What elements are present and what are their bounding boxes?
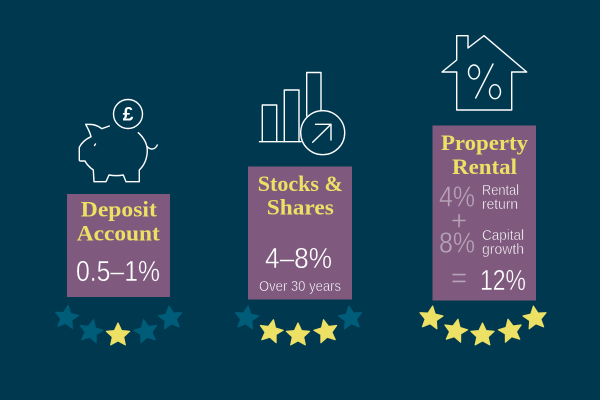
value: 0.5–1%: 0.5–1%: [76, 256, 160, 288]
panel: property rental: [432, 126, 536, 300]
label: capital growth: Capital: [482, 228, 524, 244]
panel: deposit account: [67, 194, 170, 297]
heading: stocks and shares: Stocks &: [258, 171, 343, 196]
label: capital growth: growth: [482, 242, 524, 258]
value: 8%: 8%: [439, 228, 475, 260]
plus sign: +: [451, 205, 467, 236]
label: rental return: return: [482, 197, 518, 213]
value: 4%: 4%: [439, 182, 475, 214]
label: rental return: Rental: [482, 183, 519, 199]
heading: stocks and shares second line: Shares: [267, 194, 334, 220]
icon: piggy bank with pound coin: [79, 100, 157, 182]
rating: property rental 5 of 5 stars: [418, 305, 548, 345]
value: 4–8%: 4–8%: [265, 243, 332, 275]
heading: deposit account: Deposit: [81, 196, 158, 222]
icon: house with percent sign: [442, 36, 527, 110]
label: capital growth: [482, 228, 524, 258]
label: rental return: [482, 183, 519, 213]
icon: bar chart with arrow: [260, 72, 345, 155]
rating: deposit account 1 of 5 stars: [54, 304, 183, 345]
panel: stocks and shares: [248, 166, 352, 300]
heading: property rental second line: Rental: [452, 154, 517, 179]
heading: deposit account second line: Account: [77, 220, 161, 246]
heading: property rental: Property: [441, 130, 528, 155]
rating: stocks and shares 3 of 5 stars: [234, 305, 363, 345]
note: over 30 years: Over 30 years: [259, 279, 341, 295]
value: 12%: 12%: [480, 265, 526, 297]
equals sign: =: [451, 262, 467, 293]
icon: piggy bank with pound coin: £: [123, 104, 134, 126]
